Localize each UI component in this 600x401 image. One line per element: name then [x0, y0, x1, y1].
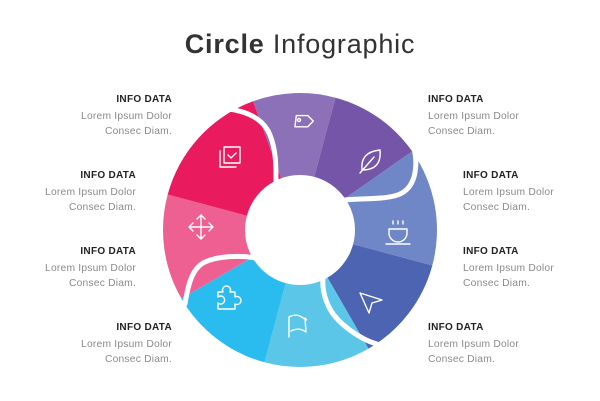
segment: blue dark — [300, 230, 432, 349]
segment: blue light — [300, 151, 437, 266]
text: bottom-left — [81, 322, 172, 365]
text: bottom-right: INFO DATA — [428, 322, 484, 333]
text: top-right — [428, 94, 519, 137]
text: mid-right 1 — [463, 170, 554, 213]
text: mid-left 2 — [45, 246, 136, 289]
text: bottom-left: Lorem Ipsum Dolor — [81, 339, 172, 350]
segment: purple dark — [300, 98, 412, 230]
text: mid-right 1: Consec Diam. — [463, 202, 530, 213]
text: mid-left 2: INFO DATA — [80, 246, 136, 257]
text: mid-right 1: Lorem Ipsum Dolor — [463, 187, 554, 198]
text: mid-right 2: INFO DATA — [463, 246, 519, 257]
text: mid-left 1: Consec Diam. — [69, 202, 136, 213]
title: Circle Infographic — [185, 29, 415, 59]
segment: cyan light — [264, 230, 368, 367]
icon: checkbox — [220, 147, 240, 167]
text: top-left: Consec Diam. — [105, 126, 172, 137]
text: mid-right 1: INFO DATA — [463, 170, 519, 181]
icon: cup — [386, 221, 410, 244]
text: mid-left 1: Lorem Ipsum Dolor — [45, 187, 136, 198]
center hole — [245, 175, 355, 285]
segment: pink light — [163, 194, 300, 298]
segment: cyan — [181, 230, 300, 362]
text: mid-right 2: Consec Diam. — [463, 278, 530, 289]
text: mid-left 1 — [45, 170, 136, 213]
text: bottom-left: INFO DATA — [116, 322, 172, 333]
text: mid-right 2: Lorem Ipsum Dolor — [463, 263, 554, 274]
text: top-right: INFO DATA — [428, 94, 484, 105]
icon: leaf — [360, 150, 380, 173]
text: bottom-right: Lorem Ipsum Dolor — [428, 339, 519, 350]
text: mid-left 2: Lorem Ipsum Dolor — [45, 263, 136, 274]
text: top-left: INFO DATA — [116, 94, 172, 105]
text: bottom-right — [428, 322, 519, 365]
icon: tag — [290, 110, 313, 133]
text: bottom-right: Consec Diam. — [428, 354, 495, 365]
text: mid-right 2 — [463, 246, 554, 289]
icon: flag — [289, 315, 307, 337]
text: mid-left 2: Consec Diam. — [69, 278, 136, 289]
icon: move arrows — [189, 215, 213, 239]
icon: puzzle — [218, 286, 241, 309]
separators — [185, 108, 416, 345]
text: top-left — [81, 94, 172, 137]
text: top-right: Consec Diam. — [428, 126, 495, 137]
segment: pink dark — [168, 101, 300, 230]
segment: purple light — [253, 93, 336, 230]
text: top-right: Lorem Ipsum Dolor — [428, 111, 519, 122]
text: mid-left 1: INFO DATA — [80, 170, 136, 181]
text: bottom-left: Consec Diam. — [105, 354, 172, 365]
text: top-left: Lorem Ipsum Dolor — [81, 111, 172, 122]
icon: cursor — [360, 293, 382, 313]
